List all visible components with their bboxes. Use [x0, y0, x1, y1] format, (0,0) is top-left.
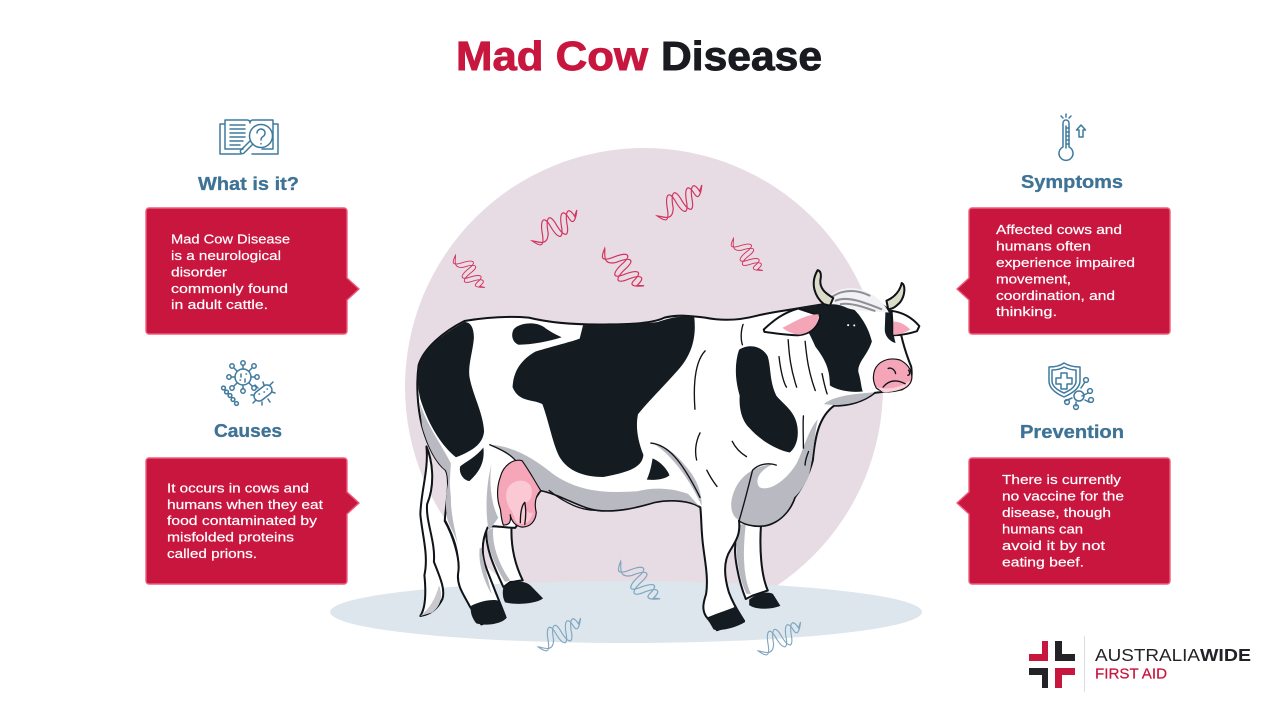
text block: avoid it by not	[1002, 538, 1105, 553]
pink prion ribbons	[451, 183, 764, 297]
text block	[171, 232, 290, 312]
heading: What is it?	[198, 174, 299, 194]
icon: thermometer	[1059, 114, 1086, 160]
text block: eating beef.	[1002, 554, 1084, 570]
cow tail	[420, 446, 443, 616]
text block	[996, 222, 1135, 319]
callout box	[957, 208, 1170, 334]
title: Disease	[661, 33, 822, 79]
cow wrinkles	[446, 324, 827, 562]
logo wordmark	[1095, 645, 1251, 682]
heading: Causes	[214, 421, 282, 441]
cow shading	[420, 392, 875, 594]
icon: shield and virus	[1049, 363, 1093, 409]
text block: humans often	[996, 238, 1091, 254]
cow hair and horns	[814, 270, 904, 313]
text block: Mad Cow Disease	[171, 232, 290, 246]
text block	[1002, 472, 1124, 570]
text block: called prions.	[167, 546, 257, 561]
ground ellipse	[330, 581, 922, 643]
text block: It occurs in cows and	[167, 480, 309, 496]
logo mark	[1029, 641, 1075, 688]
cow udder	[498, 460, 541, 527]
cow far legs	[486, 518, 780, 609]
cow muzzle	[873, 359, 912, 392]
logo wordmark: AUSTRALIA	[1095, 645, 1200, 665]
text block: in adult cattle.	[171, 297, 268, 312]
text block: disorder	[171, 264, 228, 280]
cow ears	[764, 308, 919, 335]
text block: experience impaired	[996, 255, 1135, 270]
text block: misfolded proteins	[167, 530, 294, 544]
panel: prevention	[957, 363, 1170, 584]
text block: disease, though	[1002, 505, 1111, 520]
text block: is a neurological	[171, 248, 281, 263]
text block	[167, 480, 323, 561]
background circle	[405, 148, 883, 626]
logo	[1029, 636, 1251, 692]
cow illustration	[417, 270, 919, 630]
heading: Symptoms	[1021, 172, 1123, 192]
callout box	[957, 458, 1170, 584]
panel: causes	[146, 361, 359, 584]
cow body	[417, 304, 912, 630]
title: Mad Cow	[456, 33, 648, 79]
title	[456, 33, 822, 79]
logo wordmark: FIRST AID	[1095, 666, 1167, 682]
text block: no vaccine for the	[1002, 488, 1124, 504]
callout box	[146, 458, 359, 584]
text block: coordination, and	[996, 288, 1115, 303]
text block: movement,	[996, 272, 1071, 286]
logo wordmark: WIDE	[1200, 645, 1251, 665]
text block: There is currently	[1002, 472, 1121, 487]
cow front hooves	[471, 600, 745, 630]
callout box	[146, 208, 359, 334]
icon: virus and bacteria	[222, 361, 275, 405]
text block: food contaminated by	[167, 513, 317, 528]
text block: thinking.	[996, 304, 1057, 319]
heading: Prevention	[1020, 422, 1124, 442]
text block: humans when they eat	[167, 497, 323, 512]
cow black patches	[418, 304, 896, 481]
text block: commonly found	[171, 281, 288, 296]
cow eye	[847, 324, 855, 326]
panel: symptoms	[957, 114, 1170, 334]
panel: what is it	[146, 120, 359, 334]
text block: humans can	[1002, 522, 1083, 536]
text block: Affected cows and	[996, 222, 1122, 237]
icon: book with question magnifier	[220, 120, 278, 154]
blue prion ribbons	[533, 553, 807, 657]
